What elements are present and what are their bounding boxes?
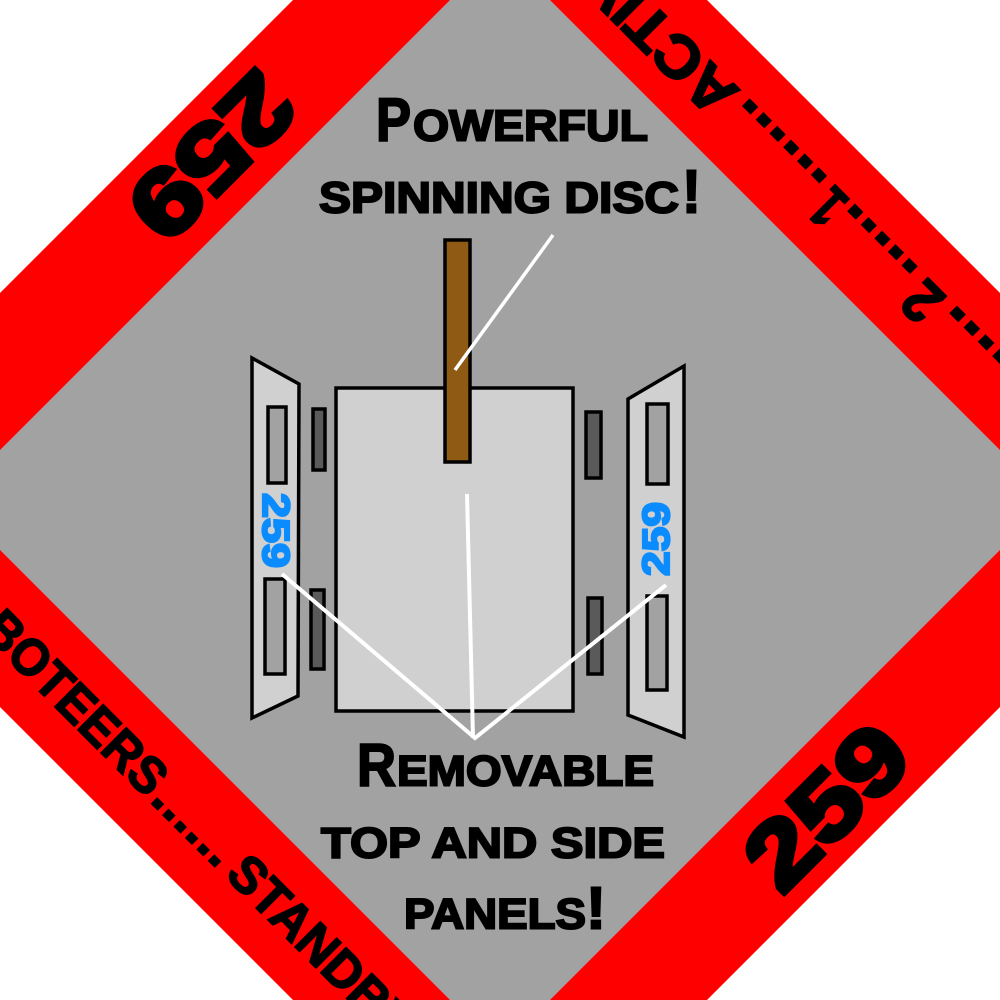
band text: countdown top right (539, 0, 1000, 413)
band text: roboteers standby bottom left: ...... (141, 768, 250, 878)
heading: removable top and side panels (321, 732, 665, 942)
heading: removable top and side panels: PANELS (404, 890, 586, 938)
right side panel (628, 366, 684, 737)
heading: removable top and side panels: TOP AND SIDE (321, 820, 665, 868)
band text: countdown top right: 1 (796, 175, 860, 239)
band number: bottom right: 259 (724, 704, 930, 910)
band text: roboteers standby bottom left (0, 547, 426, 1000)
heading: powerful spinning disc: OWERFUL (413, 102, 648, 150)
left mounting slots (311, 409, 325, 669)
heading: powerful spinning disc: ! (682, 158, 701, 226)
pointer line: disc (455, 235, 553, 370)
heading: removable top and side panels: EMOVABLE (397, 748, 654, 796)
heading: removable top and side panels: R (357, 732, 396, 799)
right side panel: 259 (636, 502, 678, 576)
band text: countdown top right: ..... (813, 192, 929, 308)
main robot top panel (336, 388, 573, 711)
heading: powerful spinning disc: SPINNING DISC (319, 174, 679, 222)
band text: countdown top right: ...... (708, 87, 838, 217)
left side panel (252, 358, 299, 718)
heading: removable top and side panels: ! (586, 876, 606, 942)
spinning disc (445, 240, 470, 462)
band text: countdown top right: 2 (888, 267, 957, 336)
heading: powerful spinning disc: P (376, 86, 411, 154)
left side panel: 259 (254, 493, 296, 568)
right mounting slots (586, 412, 602, 674)
pointer lines: removable panels (282, 494, 666, 738)
heading: powerful spinning disc (319, 86, 701, 226)
band number: top left: 259 (107, 52, 315, 260)
